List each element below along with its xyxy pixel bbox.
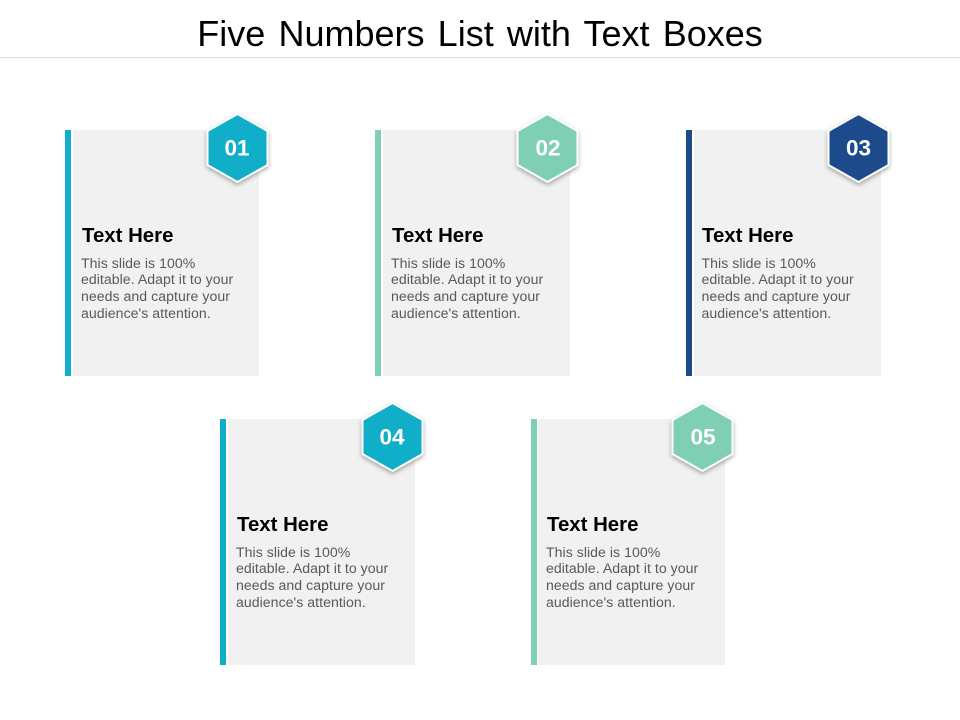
icon: hexagon 03 [825, 113, 892, 187]
text block 02: audience's attention. [391, 305, 521, 321]
icon: hexagon 01: 01 [224, 136, 250, 160]
accent bar 01 [65, 130, 70, 376]
icon: hexagon 04: 04 [379, 424, 405, 450]
accent bar 03 [686, 130, 692, 376]
text block 05: needs and capture your [546, 577, 695, 593]
icon: hexagon 03: 03 [846, 136, 871, 160]
icon: hexagon 01 [204, 113, 271, 187]
panel: card 01 [65, 113, 271, 376]
text block 01: This slide is 100% [81, 255, 195, 271]
text block 01: needs and capture your [81, 288, 230, 304]
text block 03: This slide is 100% [702, 255, 816, 271]
heading 05: Text Here [547, 514, 638, 536]
text block 04 [236, 544, 388, 610]
text block 02: editable. Adapt it to your [391, 271, 543, 287]
text block 03: needs and capture your [702, 288, 850, 304]
heading 01: Text Here [82, 225, 173, 247]
text block 05: audience's attention. [546, 594, 676, 610]
text block 04: needs and capture your [236, 577, 385, 593]
text block 04: This slide is 100% [236, 544, 350, 560]
panel: card 04 [220, 402, 426, 665]
text block 05: This slide is 100% [546, 544, 660, 560]
heading 04: Text Here [237, 514, 328, 536]
text block 04: audience's attention. [236, 594, 366, 610]
text block 03: editable. Adapt it to your [702, 271, 854, 287]
heading 02: Text Here [392, 225, 483, 247]
accent bar 04 [220, 419, 226, 665]
text block 02: This slide is 100% [391, 255, 505, 271]
icon: hexagon 02: 02 [535, 136, 561, 160]
icon: hexagon 05 [669, 402, 736, 476]
accent bar 05 [531, 419, 536, 665]
text block 01 [81, 255, 233, 321]
text block 03 [702, 255, 854, 321]
text block 02: needs and capture your [391, 288, 540, 304]
title: Five Numbers List with Text Boxes [197, 13, 763, 54]
accent bar 02 [375, 130, 380, 376]
text block 05 [546, 544, 698, 610]
text block 04: editable. Adapt it to your [236, 560, 388, 576]
text block 01: editable. Adapt it to your [81, 271, 233, 287]
text block 05: editable. Adapt it to your [546, 560, 698, 576]
text block 01: audience's attention. [81, 305, 211, 321]
icon: hexagon 04 [359, 402, 426, 476]
icon: hexagon 05: 05 [690, 424, 716, 450]
icon: hexagon 02 [514, 113, 581, 187]
panel: card 03 [686, 113, 892, 376]
panel: card 05 [531, 402, 736, 665]
panel: card 02 [375, 113, 581, 376]
text block 02 [391, 255, 543, 321]
text block 03: audience's attention. [702, 305, 831, 321]
heading 03: Text Here [702, 225, 793, 247]
